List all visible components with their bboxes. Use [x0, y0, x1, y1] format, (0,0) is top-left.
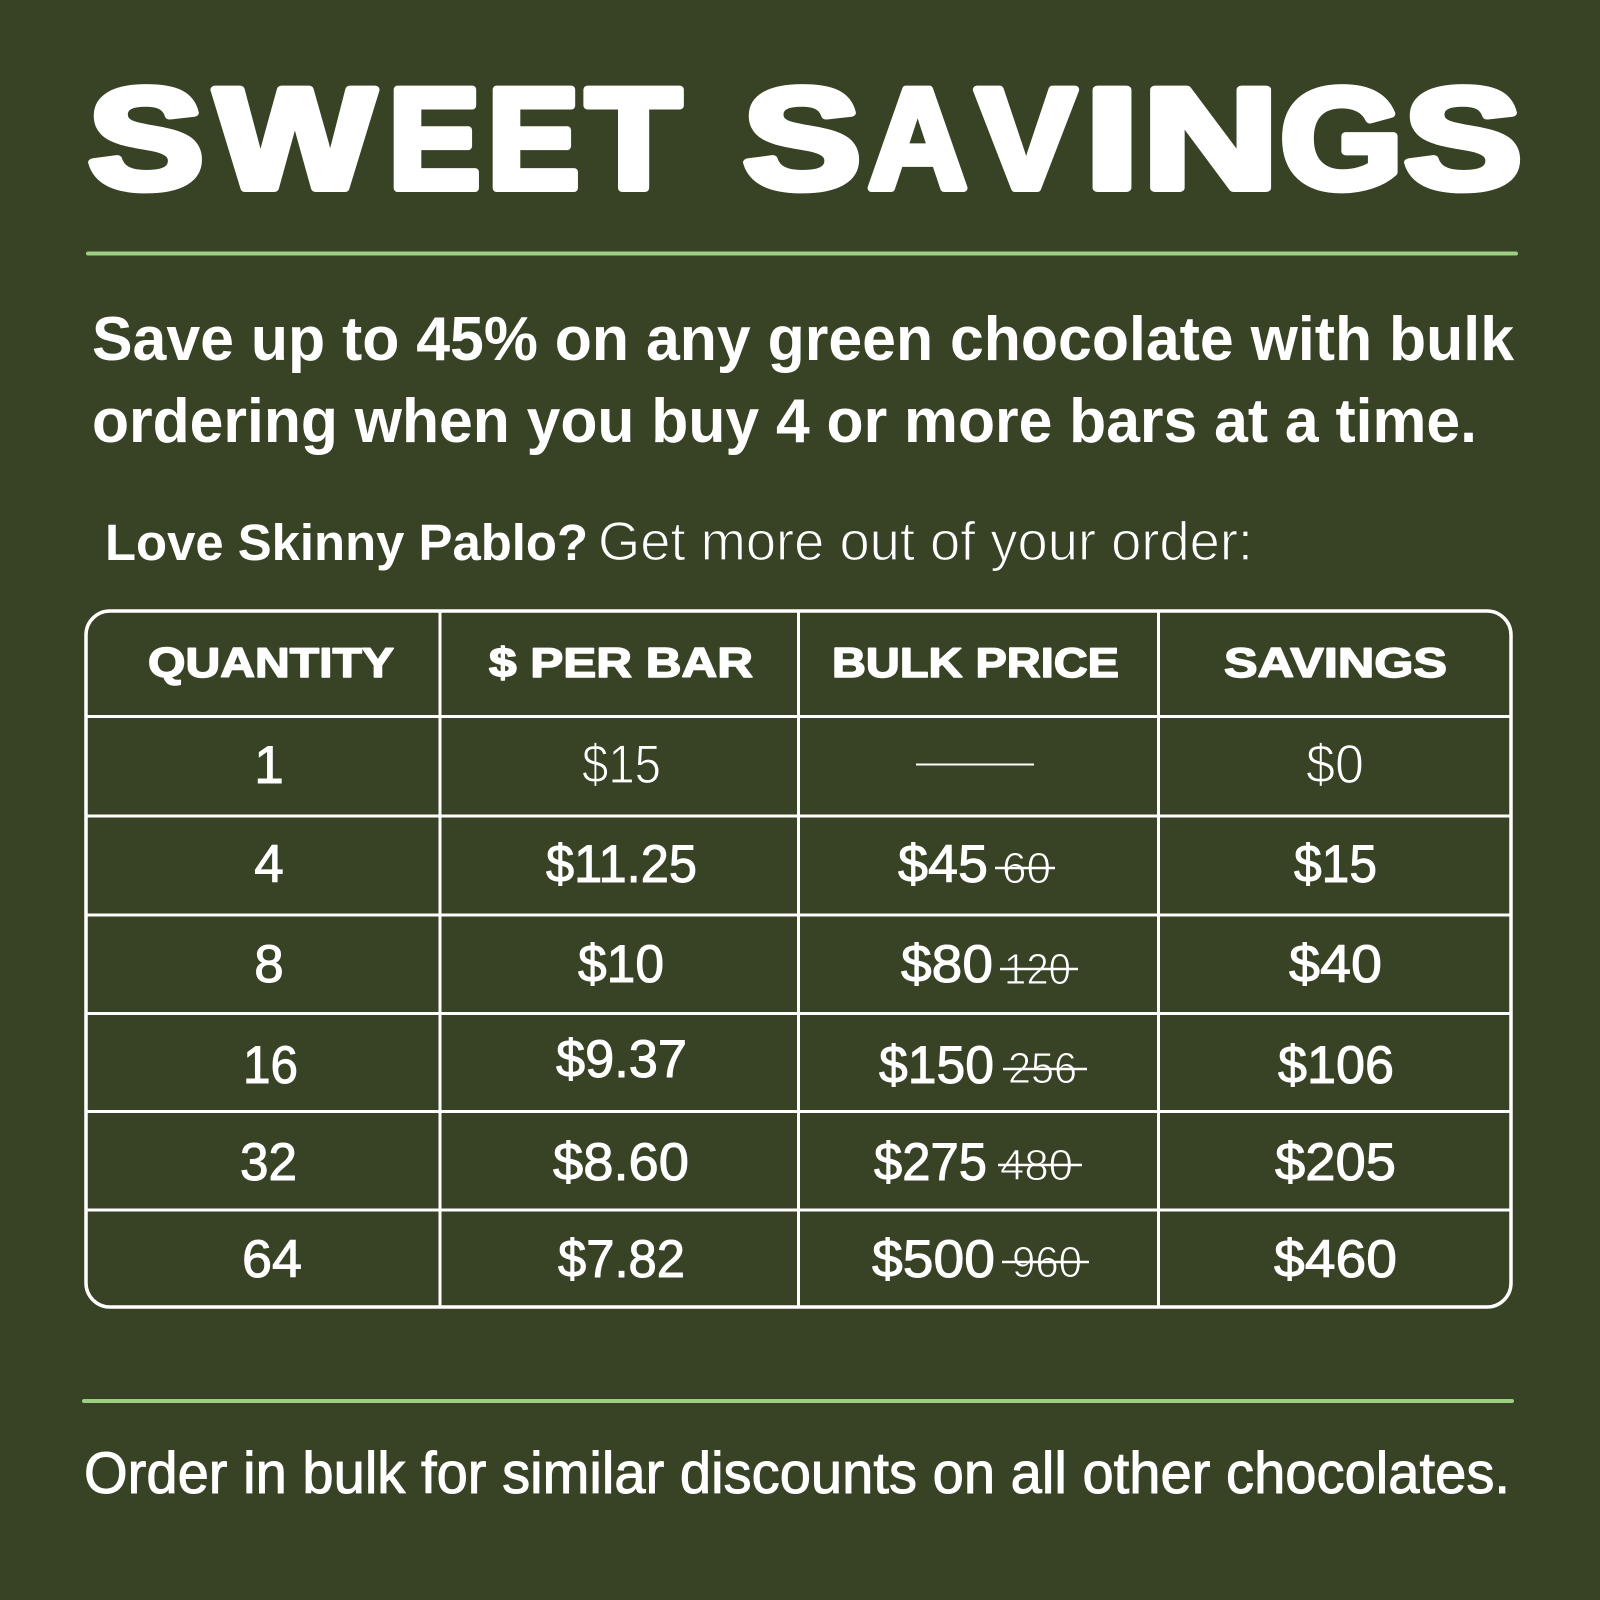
row: quantity 64: $500 — [872, 1230, 995, 1289]
row: quantity 1: 1 — [254, 736, 284, 795]
row: quantity 16: $106 — [1278, 1036, 1394, 1095]
row: quantity 4: 4 — [254, 835, 284, 894]
row: quantity 64: $7.82 — [558, 1230, 685, 1289]
title: E — [388, 60, 480, 219]
row: quantity 4: $11.25 — [546, 835, 697, 894]
row: quantity 1: $15 — [582, 733, 661, 795]
title: N — [1143, 60, 1278, 219]
title: S — [743, 60, 861, 219]
intro text: ordering when you buy 4 or more bars at a time. — [92, 387, 1477, 456]
row: quantity 64: 960 — [1012, 1238, 1082, 1287]
row: quantity 8: $10 — [578, 935, 664, 994]
title: S — [1404, 60, 1522, 219]
row: quantity 4 — [254, 835, 1377, 894]
row: quantity 1 — [254, 733, 1364, 795]
row: quantity 8: $40 — [1289, 935, 1382, 994]
row: quantity 16: $9.37 — [556, 1030, 687, 1089]
title: G — [1280, 60, 1403, 219]
row: quantity 64 — [242, 1230, 1397, 1289]
row: quantity 32: $205 — [1275, 1133, 1396, 1192]
table header row: $ PER BAR — [489, 639, 753, 686]
row: quantity 32 — [240, 1133, 1396, 1192]
row: quantity 16: 16 — [243, 1036, 298, 1095]
row: quantity 4: 60 — [1002, 844, 1051, 893]
row: quantity 4: $45 — [898, 835, 988, 894]
row: quantity 64: $460 — [1274, 1230, 1397, 1289]
table header row: BULK PRICE — [832, 639, 1119, 686]
title: E — [487, 60, 580, 219]
row: quantity 16 — [243, 1030, 1394, 1095]
row: quantity 8: 120 — [1004, 945, 1071, 994]
pricing table — [86, 611, 1511, 1307]
row: quantity 8: $80 — [901, 935, 993, 994]
intro text — [92, 305, 1515, 456]
row: quantity 64: 64 — [242, 1230, 302, 1289]
title: T — [586, 60, 681, 219]
title: I — [1085, 60, 1139, 219]
table grid — [86, 611, 1511, 1307]
row: quantity 32: 480 — [1000, 1141, 1073, 1190]
row: quantity 32: $8.60 — [553, 1133, 689, 1192]
footer note: Order in bulk for similar discounts on all other chocolates. — [84, 1441, 1510, 1506]
row: quantity 8 — [254, 935, 1382, 994]
table lead-in text — [105, 510, 1253, 572]
title: S — [88, 60, 204, 219]
row: quantity 32: 32 — [240, 1133, 297, 1192]
row: quantity 1: $0 — [1306, 733, 1364, 795]
title: V — [976, 60, 1076, 219]
row: quantity 32: $275 — [874, 1133, 987, 1192]
intro text: Save up to 45% on any green chocolate with bulk — [92, 305, 1515, 374]
table lead-in text: Love Skinny Pablo? — [105, 514, 588, 571]
table lead-in text: Get more out of your order: — [598, 510, 1253, 572]
row: quantity 16: 256 — [1008, 1044, 1077, 1093]
title: W — [215, 60, 375, 219]
row: quantity 16: $150 — [879, 1036, 994, 1095]
table header row: QUANTITY — [148, 639, 394, 686]
title: A — [868, 60, 967, 219]
row: quantity 4: $15 — [1294, 835, 1377, 894]
title — [88, 60, 1522, 219]
row: quantity 8: 8 — [254, 935, 284, 994]
table header row — [148, 639, 1447, 686]
table header row: SAVINGS — [1224, 639, 1447, 686]
